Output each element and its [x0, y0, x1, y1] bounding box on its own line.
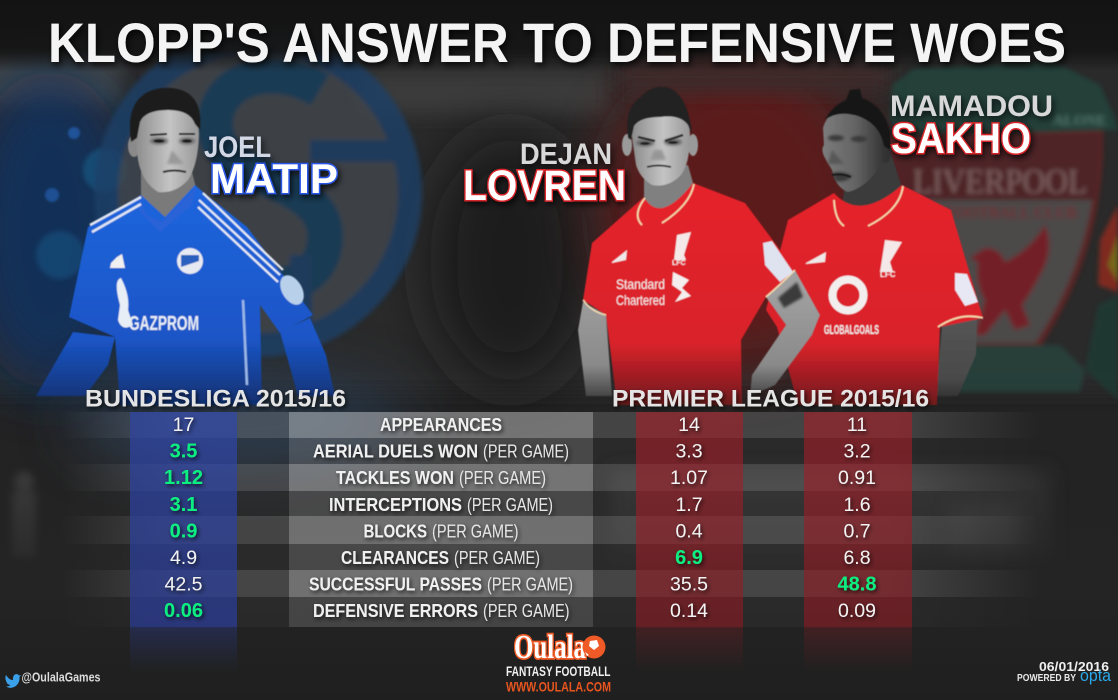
- Lovren head: [622, 87, 698, 222]
- Liverpool crest watermark: [890, 62, 1118, 400]
- row: clearances: CLEARANCES: [341, 547, 449, 568]
- heading: Premier League: PREMIER LEAGUE 2015/16: [612, 386, 929, 412]
- row: successful passes: 48.8: [838, 574, 876, 596]
- Liverpool crest watermark: FOOTBALL CLUB: [945, 203, 1077, 222]
- date and credit: POWERED BY: [1017, 672, 1076, 684]
- row: interceptions: (PER GAME): [467, 495, 553, 515]
- row: aerial duels: [170, 440, 871, 462]
- Global Goals wheel: [832, 280, 864, 310]
- row: appearances: 11: [847, 414, 867, 436]
- icon: twitter bird: [5, 674, 21, 688]
- row: successful passes: 35.5: [670, 574, 708, 596]
- LFC crest: [880, 240, 902, 272]
- row bands: [60, 412, 1040, 627]
- row: successful passes: (PER GAME): [487, 574, 573, 594]
- row: successful passes: 42.5: [165, 574, 203, 596]
- row: clearances: (PER GAME): [454, 548, 540, 568]
- Sakho arm: [936, 318, 977, 396]
- Schalke badge: [177, 248, 203, 274]
- date and credit: 06/01/2016: [1039, 659, 1109, 674]
- Gazprom sponsor: [117, 278, 133, 328]
- distant player figure: [12, 472, 36, 558]
- row: aerial duels: 3.3: [675, 440, 703, 462]
- row: blocks: [170, 520, 871, 542]
- Matip arms: [36, 318, 335, 396]
- row: blocks: (PER GAME): [432, 522, 518, 542]
- row: tackles: 1.12: [164, 467, 203, 489]
- row: tackles: TACKLES WON: [336, 467, 454, 488]
- row: blocks: 0.9: [170, 520, 197, 542]
- row: aerial duels: (PER GAME): [483, 442, 569, 462]
- Lovren shirt: [583, 183, 795, 405]
- Sakho head: [822, 89, 902, 222]
- row: tackles: (PER GAME): [459, 468, 546, 488]
- top dark band: [0, 0, 1118, 72]
- icon: football: [582, 636, 606, 658]
- row: defensive errors: DEFENSIVE ERRORS: [313, 600, 478, 621]
- row: appearances: [173, 414, 867, 436]
- row: appearances: 17: [173, 414, 194, 436]
- Liverpool crest watermark: LIVERPOOL: [913, 162, 1087, 201]
- Sakho shirt: GLOBALGOALS: [824, 322, 879, 337]
- row: clearances: 6.8: [843, 547, 871, 569]
- name: Mamadou Sakho: [890, 90, 1053, 163]
- blurred stadium stands: [0, 52, 1118, 560]
- Matip shirt: GAZPROM: [129, 313, 199, 335]
- name: Dejan Lovren: LOVREN: [463, 162, 626, 210]
- Oulala logo: WWW.OULALA.COM: [506, 678, 611, 694]
- row: clearances: [170, 547, 871, 569]
- row: defensive errors: 0.14: [670, 600, 708, 622]
- row: interceptions: 3.1: [170, 494, 197, 516]
- LFC crest: [674, 232, 691, 260]
- row: successful passes: [165, 574, 876, 596]
- twitter handle: [5, 670, 101, 688]
- row: clearances: 4.9: [170, 547, 197, 569]
- blue glow left: [0, 70, 140, 390]
- name: Dejan Lovren: DEJAN: [520, 138, 612, 171]
- name: Mamadou Sakho: SAKHO: [891, 115, 1031, 163]
- Matip neck and head: [128, 88, 200, 222]
- label column: [289, 412, 593, 627]
- row: defensive errors: 0.09: [838, 600, 876, 622]
- Oulala logo: [506, 629, 611, 694]
- Lovren arms: [578, 270, 820, 396]
- Sakho shirt: [766, 185, 983, 405]
- row: defensive errors: (PER GAME): [483, 601, 570, 621]
- Premier League patch: [763, 241, 793, 282]
- New Balance logo: [806, 252, 826, 264]
- name: Joel Matip: MATIP: [210, 155, 338, 202]
- row: clearances: 6.9: [675, 547, 703, 569]
- twitter handle: @OulalaGames: [22, 670, 100, 684]
- name: Joel Matip: [204, 131, 338, 202]
- team colour columns: [130, 412, 912, 672]
- stats table: [60, 386, 1040, 672]
- row: aerial duels: 3.2: [843, 440, 871, 462]
- row: interceptions: 1.7: [675, 494, 703, 516]
- sleeve patch: [275, 271, 309, 309]
- row: interceptions: INTERCEPTIONS: [329, 494, 462, 515]
- row: tackles: 1.07: [670, 467, 708, 489]
- row: blocks: 0.4: [675, 520, 703, 542]
- row: blocks: BLOCKS: [364, 520, 427, 542]
- Sakho shirt: LFC: [880, 270, 896, 279]
- Matip shirt: [69, 185, 313, 405]
- Lovren shirt: LFC: [672, 260, 686, 267]
- player: Dejan Lovren: [578, 87, 820, 405]
- row: tackles: 0.91: [838, 467, 876, 489]
- date and credit: opta: [1080, 666, 1112, 685]
- row: appearances: APPEARANCES: [380, 414, 502, 435]
- Schalke crest watermark: [106, 41, 410, 345]
- row: appearances: 14: [678, 414, 700, 436]
- Premier League patch: [955, 273, 978, 306]
- name: Dejan Lovren: [463, 138, 626, 210]
- row: interceptions: 1.6: [843, 494, 871, 516]
- Liverpool crest watermark: ALONE: [1053, 113, 1106, 129]
- player: Mamadou Sakho: [766, 89, 983, 405]
- logo wordmark: Oulala: [514, 629, 586, 666]
- New Balance logo: [612, 250, 627, 263]
- adidas logo: [110, 254, 125, 268]
- row: defensive errors: [164, 600, 876, 622]
- row: aerial duels: AERIAL DUELS WON: [313, 440, 478, 462]
- Lovren shirt: Chartered: [616, 292, 665, 308]
- player: Joel Matip: [36, 88, 335, 405]
- row: aerial duels: 3.5: [170, 440, 197, 462]
- bottom fade: [0, 450, 1118, 700]
- row: tackles: [164, 467, 876, 489]
- date and credit: [1017, 659, 1112, 685]
- name: Mamadou Sakho: MAMADOU: [890, 90, 1053, 123]
- Oulala logo: FANTASY FOOTBALL: [506, 663, 611, 679]
- Standard Chartered sponsor: Standard: [616, 276, 665, 292]
- row: interceptions: [170, 494, 871, 516]
- name: Joel Matip: JOEL: [204, 131, 271, 164]
- row: successful passes: SUCCESSFUL PASSES: [309, 574, 482, 594]
- row: blocks: 0.7: [843, 520, 871, 542]
- heading: Bundesliga: BUNDESLIGA 2015/16: [85, 386, 346, 412]
- row: defensive errors: 0.06: [164, 600, 203, 622]
- red haze behind Liverpool players: [600, 50, 880, 370]
